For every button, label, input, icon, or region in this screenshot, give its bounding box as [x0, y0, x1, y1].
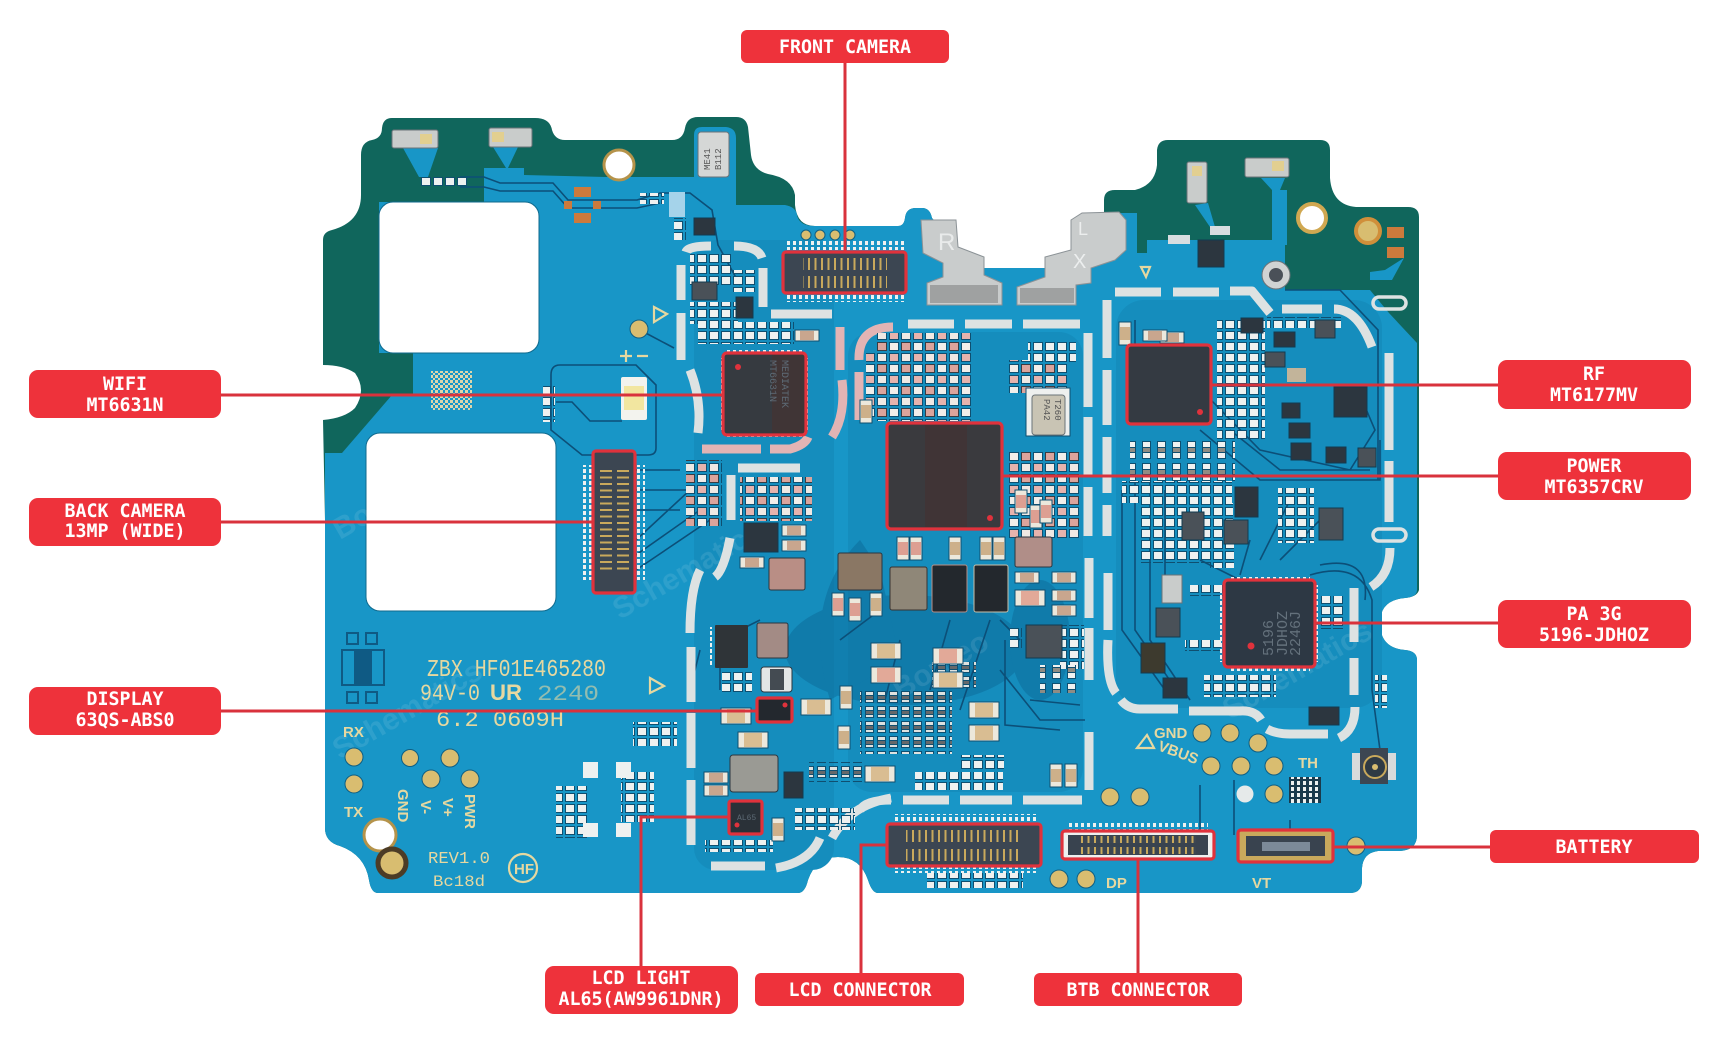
connector battery [1238, 830, 1333, 862]
top metal shield R [921, 220, 1002, 305]
chip PA 3G 5196-JDHOZ: JDHOZ [1275, 611, 1292, 656]
watermark text: Schematics [607, 514, 768, 626]
copper traces [460, 177, 1380, 850]
callout: wifi: MT6631N [86, 395, 164, 416]
light blue chip and orange pads [564, 187, 1404, 258]
callout: pa 3g: PA 3G [1566, 604, 1622, 625]
silkscreen text: V+ [439, 798, 456, 817]
chip POWER MT6357CRV [887, 423, 1002, 529]
connector front camera [783, 240, 906, 302]
silkscreen text: ZBX HF01E465280 [427, 657, 606, 684]
watermark text [327, 465, 1378, 766]
silkscreen text: V- [417, 800, 434, 814]
callout: display: 63QS-ABS0 [75, 710, 175, 731]
callout: lcd light [545, 966, 738, 1014]
callout: lcd light: LCD LIGHT [591, 968, 691, 989]
silkscreen text: 6.2 0609H [436, 708, 564, 733]
top metal shield L: X [1073, 251, 1086, 273]
callout: pa 3g: 5196-JDHOZ [1539, 625, 1649, 646]
antenna clips [392, 128, 1289, 203]
board copper: blue solder mask [325, 127, 1417, 893]
silkscreen text: TH [1298, 755, 1318, 772]
callout: back camera [29, 498, 221, 546]
callout: lcd connector: LCD CONNECTOR [788, 980, 932, 1001]
callout: lcd connector [755, 973, 964, 1006]
small dark chips [692, 218, 1376, 798]
silkscreen text [343, 657, 1318, 892]
callout: back camera: BACK CAMERA [64, 501, 186, 522]
dense passive fields [420, 175, 1387, 888]
silkscreen text: Bc18d [433, 873, 485, 891]
silkscreen triangles and polarity [509, 267, 1154, 882]
callout: wifi: WIFI [103, 374, 147, 395]
callout: front camera [741, 30, 949, 63]
flash LED [621, 377, 647, 420]
crystal T260 [1026, 388, 1070, 436]
darker inner zones [694, 240, 1382, 870]
callout: battery: BATTERY [1555, 837, 1633, 858]
callout: lcd light: AL65(AW9961DNR) [558, 989, 724, 1010]
callout: btb connector: BTB CONNECTOR [1066, 980, 1210, 1001]
callout: pa 3g [1498, 600, 1691, 648]
callout leader lines [221, 63, 1498, 973]
board outline: green solder mask [323, 117, 1419, 893]
antenna feed traces [403, 147, 1404, 280]
chip PA 3G 5196-JDHOZ: 5196 [1261, 620, 1278, 656]
callout: rf [1498, 360, 1691, 409]
silkscreen text: GND [1154, 725, 1188, 742]
callout: power [1498, 452, 1691, 500]
callout: power: POWER [1566, 456, 1622, 477]
crystal ME41: B112 [714, 148, 724, 170]
chip WIFI MT6631N: MEDIATEK [778, 360, 789, 408]
silkscreen text: VT [1252, 875, 1271, 892]
left footprint outline [342, 633, 384, 703]
callout: power: MT6357CRV [1544, 477, 1644, 498]
silkscreen text: GND [394, 789, 411, 822]
silkscreen text: DP [1106, 875, 1127, 892]
coax connectors [1262, 261, 1396, 784]
inductors and power parts [710, 537, 1052, 792]
silver shield strips [681, 246, 1406, 868]
callout: wifi [29, 370, 221, 418]
chip RF MT6177MV [1127, 345, 1211, 424]
chip WIFI MT6631N: MT6631N [766, 360, 777, 402]
watermark text: Borneo [887, 625, 994, 706]
callout: back camera: 13MP (WIDE) [64, 521, 186, 542]
silkscreen text: VBUS [1156, 738, 1201, 768]
top metal shield R: R [938, 229, 955, 256]
camera window bottom [366, 433, 556, 611]
pcb board [221, 63, 1498, 973]
crystal T260: T260 [1052, 399, 1062, 421]
crystal T260: PA42 [1041, 399, 1051, 421]
connector LCD [887, 814, 1041, 873]
mounting holes and gold pads [345, 150, 1380, 888]
watermark shading [785, 540, 1070, 705]
connector BTB [1062, 823, 1214, 859]
callout: display [29, 687, 221, 735]
red component outlines [593, 252, 1333, 866]
connector back camera [583, 451, 645, 593]
chip display driver [757, 698, 792, 722]
silkscreen text: 2240 [537, 682, 599, 707]
chip LCD light [729, 801, 762, 834]
capacitors [704, 322, 1184, 841]
callout: btb connector [1034, 973, 1242, 1006]
callout: rf: MT6177MV [1550, 385, 1638, 406]
callout: rf: RF [1583, 364, 1605, 385]
top metal shield L [1017, 212, 1126, 305]
silkscreen text: TX [344, 804, 363, 821]
camera window top [379, 202, 539, 353]
chip PA 3G 5196-JDHOZ [1220, 576, 1319, 671]
silkscreen text: PWR [461, 794, 478, 829]
watermark text: Schematics [327, 654, 488, 766]
chip LCD light: AL65 [737, 814, 756, 823]
chip WIFI MT6631N [719, 350, 810, 438]
callout: battery [1490, 830, 1699, 863]
callout: front camera: FRONT CAMERA [779, 37, 911, 58]
data matrix code [431, 371, 472, 410]
silkscreen text: HF [514, 861, 534, 878]
crystal ME41: ME41 [703, 148, 713, 170]
chip PA 3G 5196-JDHOZ: 2246J [1288, 611, 1305, 656]
crystal ME41 [698, 132, 729, 177]
top metal shield L: L [1078, 219, 1088, 239]
silkscreen text: UR [490, 680, 522, 705]
watermark text: Schematics [1217, 614, 1378, 726]
silkscreen text: 94V-0 [420, 681, 480, 707]
watermark text: Borneo [327, 465, 434, 546]
silkscreen text: RX [343, 724, 364, 741]
silkscreen text: REV1.0 [428, 850, 490, 869]
callout: display: DISPLAY [86, 689, 164, 710]
